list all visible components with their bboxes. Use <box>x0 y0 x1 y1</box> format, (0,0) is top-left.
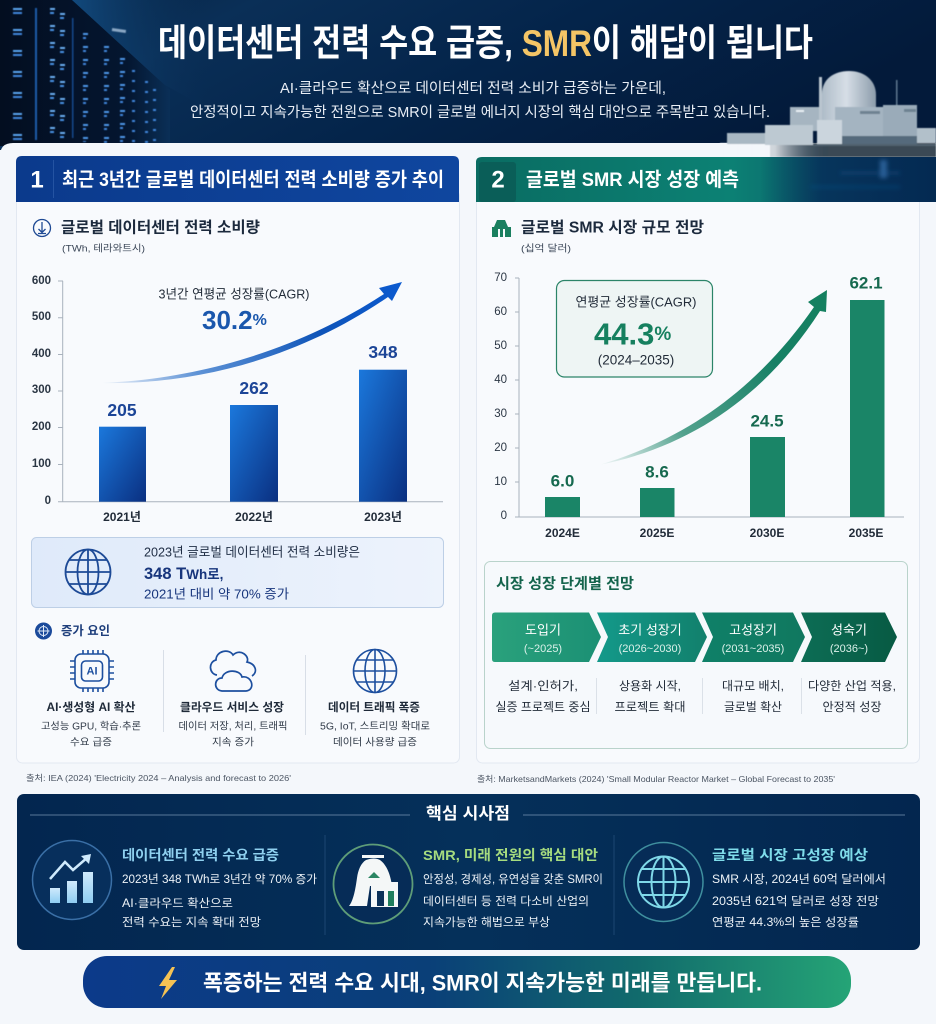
driver 1 text: 수요 급증 <box>70 736 112 748</box>
implication 3: 2035년 621억 달러로 성장 전망 <box>712 894 879 908</box>
x labels: 2025E <box>640 526 674 540</box>
stage descriptions: 안정적 성장 <box>822 700 882 714</box>
bar values <box>551 274 883 490</box>
market stages box: 시장 성장 단계별 전망 <box>496 576 634 592</box>
stage chevrons: (2036~) <box>830 643 868 655</box>
x labels: 2022년 <box>235 510 273 524</box>
implication 3: 글로벌 시장 고성장 예상 <box>712 847 868 863</box>
stage descriptions: 상용화 시작, <box>619 679 681 693</box>
driver 2 text <box>178 701 288 748</box>
x labels <box>103 510 402 524</box>
CAGR label: 30.2% <box>202 305 267 335</box>
stage descriptions: 프로젝트 확대 <box>614 700 686 714</box>
stage chevrons <box>492 612 897 662</box>
callout: 348 TWh: 2021년 대비 약 70% 증가 <box>144 586 289 602</box>
y axis: 600 <box>32 275 51 287</box>
nuclear plant illustration <box>720 71 936 157</box>
stage descriptions: 설계·인허가, <box>508 679 578 693</box>
implication 1: 데이터센터 전력 수요 급증 <box>122 847 279 863</box>
x labels: 2023년 <box>364 510 402 524</box>
y axis: 20 <box>494 442 507 454</box>
closing banner <box>83 956 851 1008</box>
driver 1 text: AI·생성형 AI 확산 <box>46 700 136 714</box>
CAGR label: 3년간 연평균 성장률(CAGR) <box>158 286 310 302</box>
icon: growth chart <box>32 840 112 920</box>
driver 1 text: 고성능 GPU, 학습·추론 <box>41 720 141 732</box>
implication 2: 안정성, 경제성, 유연성을 갖춘 SMR이 <box>423 872 603 886</box>
bar values: 62.1 <box>849 274 883 292</box>
arrow: growth <box>100 282 402 383</box>
implication 1: AI·클라우드 확산으로 <box>122 897 233 910</box>
bars <box>99 370 407 502</box>
icon: lightning bolt <box>159 967 177 999</box>
panel 2 header <box>476 157 936 202</box>
implication 3: 연평균 44.3%의 높은 성장률 <box>712 916 859 929</box>
y axis: 50 <box>494 340 507 352</box>
icon: power consumption <box>34 220 50 236</box>
implication 2: 데이터센터 등 전력 다소비 산업의 <box>423 895 589 908</box>
stage descriptions: 글로벌 확산 <box>724 700 782 714</box>
driver 3 text: 데이터 사용량 급증 <box>333 736 417 748</box>
CAGR label <box>158 286 310 335</box>
driver 2 text: 클라우드 서비스 성장 <box>180 701 284 714</box>
x labels: 2035E <box>849 526 883 540</box>
driver 2 text: 지속 증가 <box>212 736 254 748</box>
callout: 348 TWh: 2023년 글로벌 데이터센터 전력 소비량은 <box>144 544 360 560</box>
implication 3: SMR 시장, 2024년 60억 달러에서 <box>712 872 886 886</box>
stage chevrons: 초기 성장기 <box>618 622 682 638</box>
chart heading <box>492 218 704 254</box>
server racks image <box>0 0 210 146</box>
subtitle <box>190 80 770 121</box>
stage chevrons: (2026~2030) <box>619 643 681 655</box>
chart heading: (십억 달러) <box>521 242 571 254</box>
callout: 348 TWh: 348 TWh로, <box>144 565 223 583</box>
growth drivers <box>35 622 430 748</box>
subtitle: 안정적이고 지속가능한 전원으로 SMR이 글로벌 에너지 시장의 핵심 대안으로 주목받고 있습니다. <box>190 104 770 121</box>
y axis: 10 <box>494 476 507 488</box>
CAGR callout: 44.3% <box>594 316 671 352</box>
panel 1 header: 최근 3년간 글로벌 데이터센터 전력 소비량 증가 추이 <box>62 169 444 191</box>
icon: globe <box>354 650 396 692</box>
chart heading: 글로벌 SMR 시장 규모 전망 <box>521 218 704 236</box>
icon: SMR plant <box>334 844 412 924</box>
icon: globe <box>624 842 703 922</box>
y axis: 0 <box>45 495 51 507</box>
stage chevrons: 성숙기 <box>831 622 867 638</box>
icon: SMR plant <box>492 220 511 237</box>
CAGR callout <box>556 280 712 377</box>
icon: cloud <box>210 651 255 691</box>
bars <box>545 300 884 517</box>
implication 2: SMR, 미래 전원의 핵심 대안 <box>423 847 598 863</box>
stage descriptions: 실증 프로젝트 중심 <box>496 700 590 714</box>
x labels: 2030E <box>750 526 784 540</box>
implication 3 <box>624 842 886 929</box>
panel 1: data center power <box>16 156 460 763</box>
panel 2: SMR market <box>476 157 936 763</box>
stage chevrons: (~2025) <box>524 643 562 655</box>
stage descriptions: 다양한 산업 적용, <box>808 679 896 693</box>
callout: 348 TWh <box>32 538 444 608</box>
stage chevrons: 도입기 <box>525 622 561 638</box>
driver 1 text <box>41 700 141 748</box>
y axis: 200 <box>32 421 51 433</box>
y axis: 70 <box>494 272 507 284</box>
y axis: 100 <box>32 458 51 470</box>
icon: AI chip: AI <box>86 666 98 678</box>
x labels: 2021년 <box>103 510 141 524</box>
implication 1: 2023년 348 TWh로 3년간 약 70% 증가 <box>122 872 317 886</box>
CAGR callout: (2024–2035) <box>598 352 674 368</box>
panel 2 header: 글로벌 SMR 시장 성장 예측 <box>526 169 739 191</box>
y axis: 400 <box>32 348 51 360</box>
arrow: growth <box>599 290 827 465</box>
y axis: 30 <box>494 408 507 420</box>
implication 2: 지속가능한 해법으로 부상 <box>423 916 550 929</box>
closing banner: 폭증하는 전력 수요 시대, SMR이 지속가능한 미래를 만듭니다. <box>203 970 762 996</box>
chart heading: 글로벌 데이터센터 전력 소비량 <box>61 218 260 236</box>
icon: AI chip <box>70 650 114 692</box>
bar values: 262 <box>239 378 269 398</box>
bar values <box>107 342 398 420</box>
bar chart: SMR market <box>494 272 904 540</box>
panel 1 header: 1 <box>30 166 44 194</box>
implication 2 <box>334 844 603 929</box>
bar values: 205 <box>107 400 137 420</box>
panel 1 header <box>16 156 459 202</box>
market stages box <box>484 562 908 748</box>
y axis <box>494 272 904 522</box>
x labels: 2024E <box>545 526 580 540</box>
y axis: 40 <box>494 374 507 386</box>
bar values: 8.6 <box>645 462 669 482</box>
water reflection <box>760 157 936 202</box>
stage chevrons: 고성장기 <box>729 622 777 638</box>
x labels <box>545 526 883 540</box>
header banner <box>0 0 936 150</box>
subtitle: AI·클라우드 확산으로 데이터센터 전력 소비가 급증하는 가운데, <box>280 80 666 97</box>
implication 1: 전력 수요는 지속 확대 전망 <box>122 916 261 929</box>
bar values: 348 <box>368 342 398 362</box>
panel 2 header: 2 <box>491 166 505 194</box>
stage descriptions: 대규모 배치, <box>722 679 784 693</box>
driver 3 text: 데이터 트래픽 폭증 <box>328 700 420 714</box>
bar chart: power consumption <box>32 275 443 524</box>
title: 데이터센터 전력 수요 급증, SMR이 해답이 됩니다 <box>158 22 813 64</box>
chart heading <box>34 218 260 254</box>
stage descriptions <box>496 679 896 714</box>
growth drivers: 증가 요인 <box>61 623 110 638</box>
CAGR callout: 연평균 성장률(CAGR) <box>576 294 696 310</box>
icon: globe <box>66 550 110 594</box>
y axis: 0 <box>501 510 507 522</box>
y axis: 60 <box>494 306 507 318</box>
bar values: 24.5 <box>750 412 784 430</box>
driver 3 text: 5G, IoT, 스트리밍 확대로 <box>320 720 430 732</box>
implication 1 <box>32 840 317 929</box>
driver 2 text: 데이터 저장, 처리, 트래픽 <box>178 720 288 732</box>
source 2: 출처: MarketsandMarkets (2024) 'Small Modular Reactor Market – Global Forecast to 2035' <box>477 774 835 784</box>
section heading: 핵심 시사점 <box>426 804 510 823</box>
y axis: 300 <box>32 384 51 396</box>
bar values: 6.0 <box>551 472 574 490</box>
icon: drivers <box>35 622 52 640</box>
driver 3 text <box>320 700 430 748</box>
y axis <box>32 275 443 507</box>
y axis: 500 <box>32 311 51 323</box>
panel: key implications <box>17 794 920 950</box>
stage chevrons: (2031~2035) <box>722 643 784 655</box>
chart heading: (TWh, 테라와트시) <box>62 242 145 254</box>
source 1: 출처: IEA (2024) 'Electricity 2024 – Analysis and forecast to 2026' <box>26 773 291 783</box>
